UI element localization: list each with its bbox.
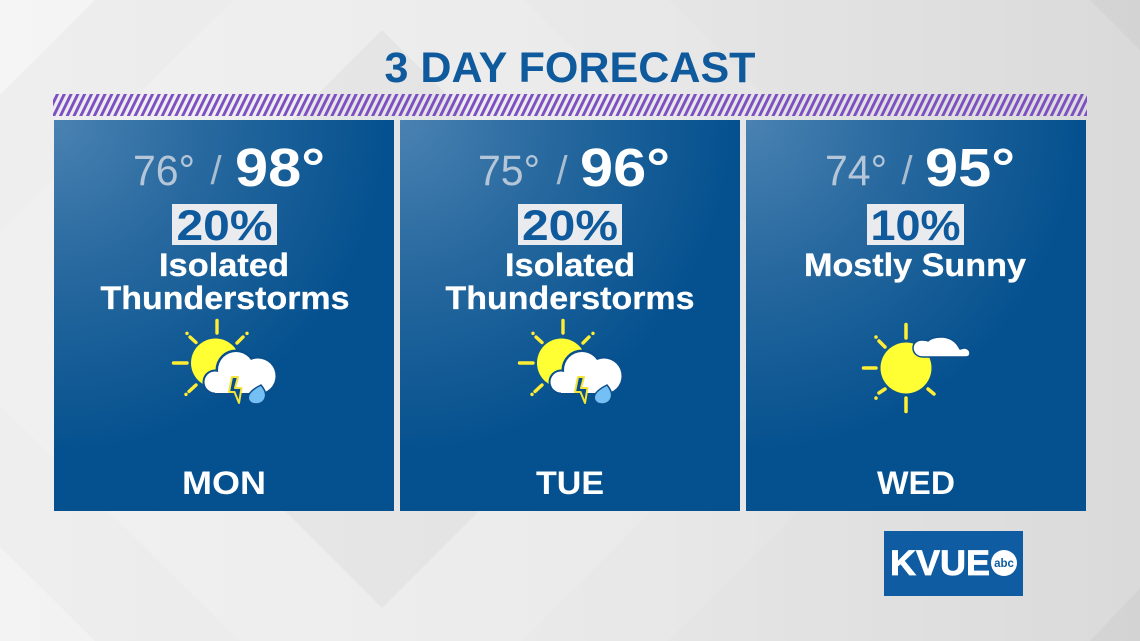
icon: sun with thunderstorm [174, 320, 278, 404]
day label: Wednesday: WED [877, 465, 955, 501]
panel background: Wednesday [746, 120, 1086, 511]
panel: Monday [54, 120, 394, 511]
panel: Tuesday [400, 120, 740, 511]
precipitation chance: Monday: 20% [176, 202, 272, 250]
temperatures: Tuesday [478, 138, 670, 198]
logo: KVUE abc: KVUE [890, 544, 990, 583]
temperatures: Wednesday [825, 138, 1015, 198]
logo: KVUE abc [884, 531, 1023, 596]
temperatures: Tuesday: / [556, 149, 568, 193]
icon: sun with thunderstorm [520, 320, 624, 404]
condition: Wednesday: Mostly Sunny [804, 247, 1026, 283]
day label: Tuesday: TUE [536, 465, 604, 501]
precipitation chance: Wednesday: 10% [870, 202, 960, 250]
temperatures: Tuesday: 96° [580, 138, 670, 198]
temperatures: Monday: 98° [235, 138, 325, 198]
icon: sun with small cloud [864, 324, 970, 412]
logo: KVUE abc: abc [994, 558, 1015, 570]
panel background: Monday [54, 120, 394, 511]
temperatures: Tuesday: 75° [478, 147, 540, 195]
condition: Tuesday [446, 247, 694, 316]
temperatures: Monday [133, 138, 325, 198]
condition: Tuesday: Thunderstorms [446, 280, 694, 316]
panel: Wednesday [746, 120, 1086, 511]
temperatures: Monday: / [210, 149, 222, 193]
purple hatched stripe [53, 94, 1087, 116]
temperatures: Monday: 76° [133, 147, 195, 195]
day label: Monday: MON [182, 465, 266, 501]
condition: Monday: Thunderstorms [100, 280, 350, 316]
temperatures: Wednesday: 95° [925, 138, 1015, 198]
title: 3 DAY FORECAST [384, 44, 756, 92]
temperatures: Wednesday: / [901, 149, 913, 193]
temperatures: Wednesday: 74° [825, 147, 887, 195]
panel background: Tuesday [400, 120, 740, 511]
condition: Monday: Isolated [159, 247, 289, 283]
condition: Tuesday: Isolated [505, 247, 635, 283]
condition: Monday [100, 247, 350, 316]
precipitation chance: Tuesday: 20% [522, 202, 618, 250]
